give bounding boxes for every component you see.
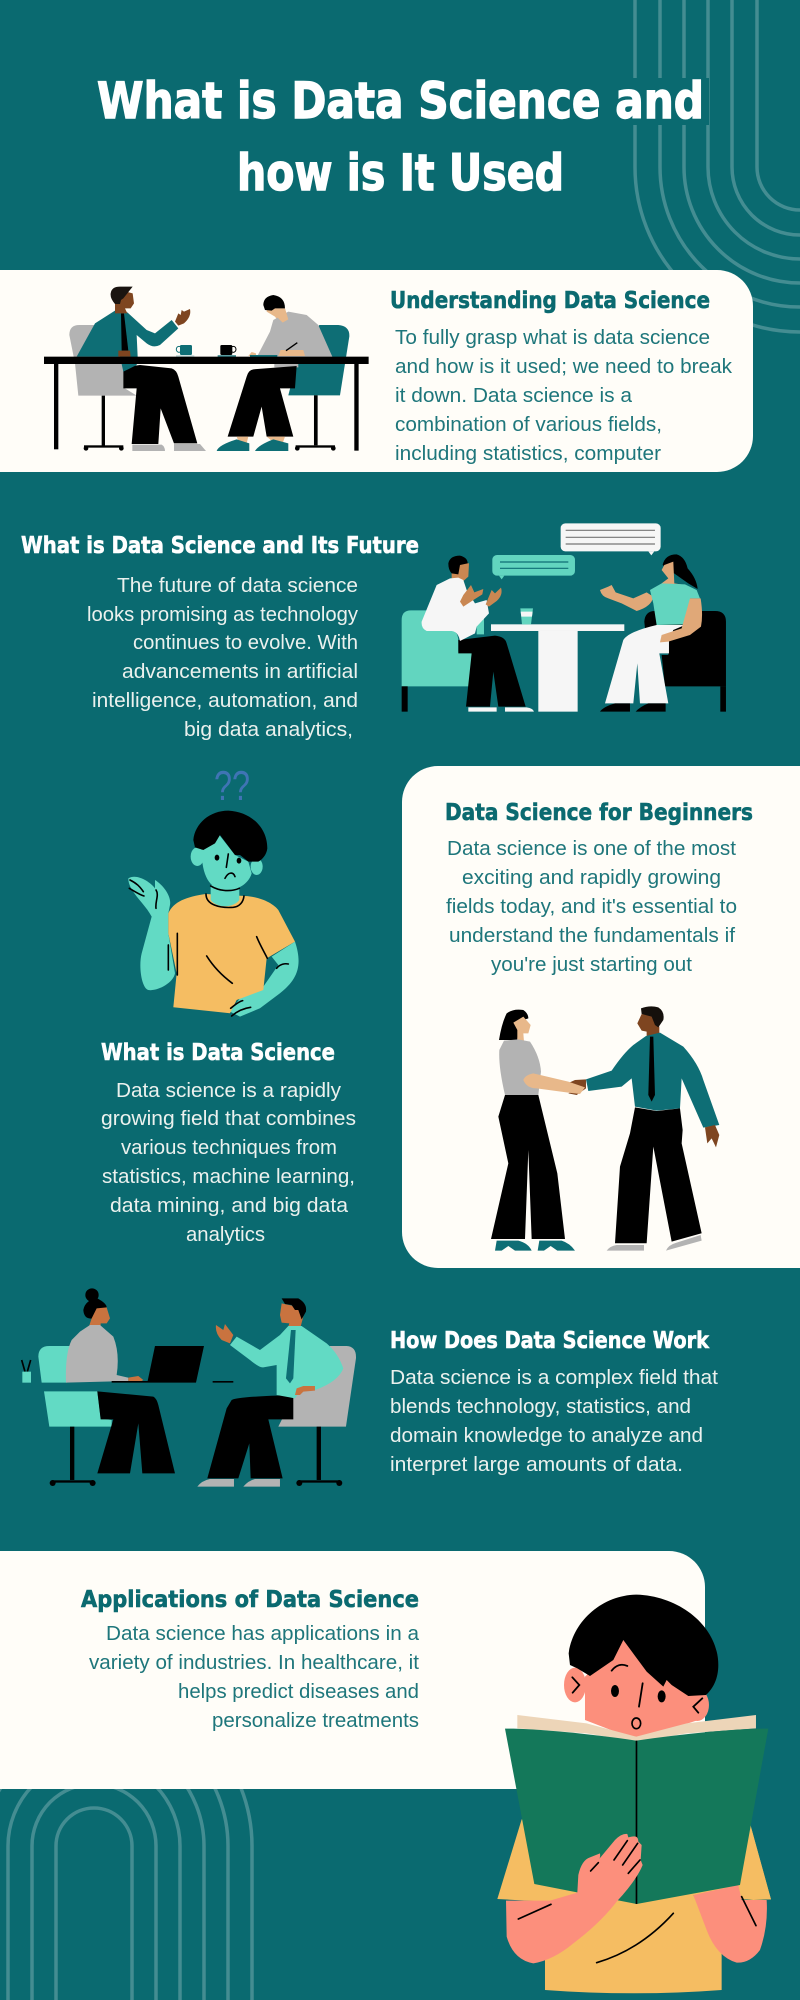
- illustration: confused boy with question marks: [128, 762, 299, 1017]
- body text: Data science is a rapidly: [116, 1079, 342, 1102]
- body text: looks promising as technology: [87, 603, 359, 626]
- body text: [446, 837, 737, 976]
- body text: big data analytics,: [184, 718, 353, 741]
- heading: What is Data Science and Its Future: [21, 533, 419, 559]
- title: What is Data Science and: [97, 72, 704, 130]
- body text: To fully grasp what is data science: [395, 326, 710, 349]
- heading: Understanding Data Science: [390, 288, 710, 314]
- heading: Applications of Data Science: [81, 1587, 419, 1613]
- title: how is It Used: [237, 144, 564, 202]
- body text: personalize treatments: [212, 1709, 419, 1732]
- body text: Data science is a complex field that: [390, 1366, 718, 1389]
- question marks: ??: [214, 762, 250, 809]
- body text: advancements in artificial: [122, 660, 358, 683]
- body text: interpret large amounts of data.: [390, 1453, 683, 1476]
- section: how does data science work: [22, 1288, 718, 1487]
- heading: What is Data Science: [101, 1040, 335, 1066]
- panel: understanding data science: [0, 270, 753, 472]
- body text: understand the fundamentals if: [449, 924, 735, 947]
- body text: and how is it used; we need to break: [395, 355, 733, 378]
- illustration: two people shaking hands: [491, 1006, 719, 1251]
- body text: [395, 326, 733, 465]
- body text: [101, 1079, 356, 1246]
- body text: fields today, and it's essential to: [446, 895, 737, 918]
- illustration: two people at a table: [44, 287, 369, 451]
- body text: [87, 574, 359, 741]
- panel: applications of data science: [0, 1551, 705, 1789]
- body text: statistics, machine learning,: [102, 1165, 355, 1188]
- panel: data science for beginners: [402, 766, 800, 1268]
- body text: [89, 1622, 420, 1732]
- body text: growing field that combines: [101, 1107, 356, 1130]
- body text: intelligence, automation, and: [92, 689, 358, 712]
- body text: combination of various fields,: [395, 413, 662, 436]
- illustration: boy reading a green book: [497, 1595, 771, 1993]
- body text: helps predict diseases and: [178, 1680, 419, 1703]
- heading: How Does Data Science Work: [390, 1328, 710, 1354]
- body text: analytics: [186, 1223, 265, 1246]
- body text: you're just starting out: [491, 953, 692, 976]
- illustration: conversation across a cafe table: [402, 523, 726, 712]
- body text: various techniques from: [121, 1136, 337, 1159]
- title: [97, 72, 704, 202]
- body text: The future of data science: [117, 574, 358, 597]
- body text: continues to evolve. With: [133, 631, 358, 654]
- body text: variety of industries. In healthcare, it: [89, 1651, 419, 1674]
- body text: domain knowledge to analyze and: [390, 1424, 703, 1447]
- body text: it down. Data science is a: [395, 384, 633, 407]
- body text: blends technology, statistics, and: [390, 1395, 691, 1418]
- body text: Data science is one of the most: [447, 837, 736, 860]
- heading: Data Science for Beginners: [445, 800, 753, 826]
- body text: Data science has applications in a: [106, 1622, 420, 1645]
- section: what is data science: [101, 1040, 356, 1246]
- body text: data mining, and big data: [110, 1194, 349, 1217]
- illustration: colleagues at a desk with laptop: [22, 1288, 356, 1487]
- section: data science and its future: [21, 523, 726, 741]
- body text: including statistics, computer: [395, 442, 661, 465]
- body text: [390, 1366, 718, 1476]
- body text: exciting and rapidly growing: [462, 866, 721, 889]
